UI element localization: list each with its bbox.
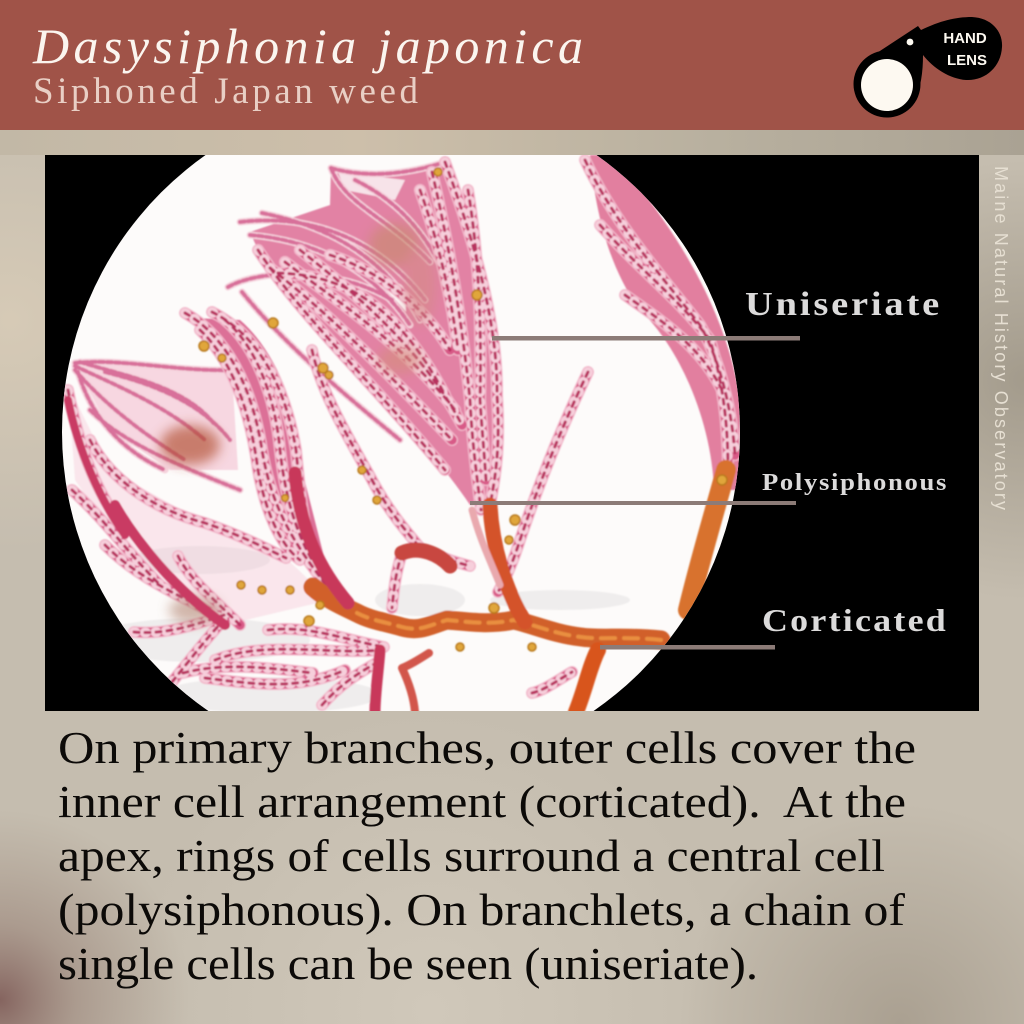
label: Uniseriate: Uniseriate [745, 286, 942, 323]
label: Polysiphonous: Polysiphonous [762, 470, 948, 496]
label line: corticated [600, 645, 775, 650]
body text [58, 722, 916, 989]
header band [0, 0, 1024, 130]
subtitle: Siphoned Japan weed [33, 71, 418, 112]
icon: hand lens logo [854, 17, 1002, 118]
label line: uniseriate [492, 336, 800, 340]
photo panel: microscope view [45, 155, 979, 711]
body text: (polysiphonous). On branchlets, a chain of [58, 884, 906, 935]
corticated main stem [68, 400, 726, 712]
orange spores [199, 168, 727, 651]
thick uniseriate strands [68, 160, 735, 705]
body text: single cells can be seen (uniseriate). [58, 938, 758, 989]
thin strands of the fans [75, 162, 445, 490]
icon: hand lens logo: HAND [943, 30, 987, 47]
body text: On primary branches, outer cells cover the [58, 722, 916, 773]
pink underlays of the dense plumes [68, 155, 740, 625]
white gaps [386, 283, 407, 312]
microscope field [62, 155, 740, 711]
body text: apex, rings of cells surround a central cell [58, 830, 885, 881]
credit: vertical text: Maine Natural History Observatory [991, 166, 1011, 510]
icon: hand lens logo: LENS [947, 52, 987, 69]
label line: polysiphonous [470, 501, 796, 505]
title: Dasysiphonia japonica [32, 18, 583, 74]
body text: inner cell arrangement (corticated). At the [58, 776, 906, 827]
label: Corticated: Corticated [762, 602, 948, 638]
algae specimen [68, 155, 740, 713]
pale shadow areas [90, 546, 630, 713]
brown tufts and darker masses [160, 223, 436, 624]
